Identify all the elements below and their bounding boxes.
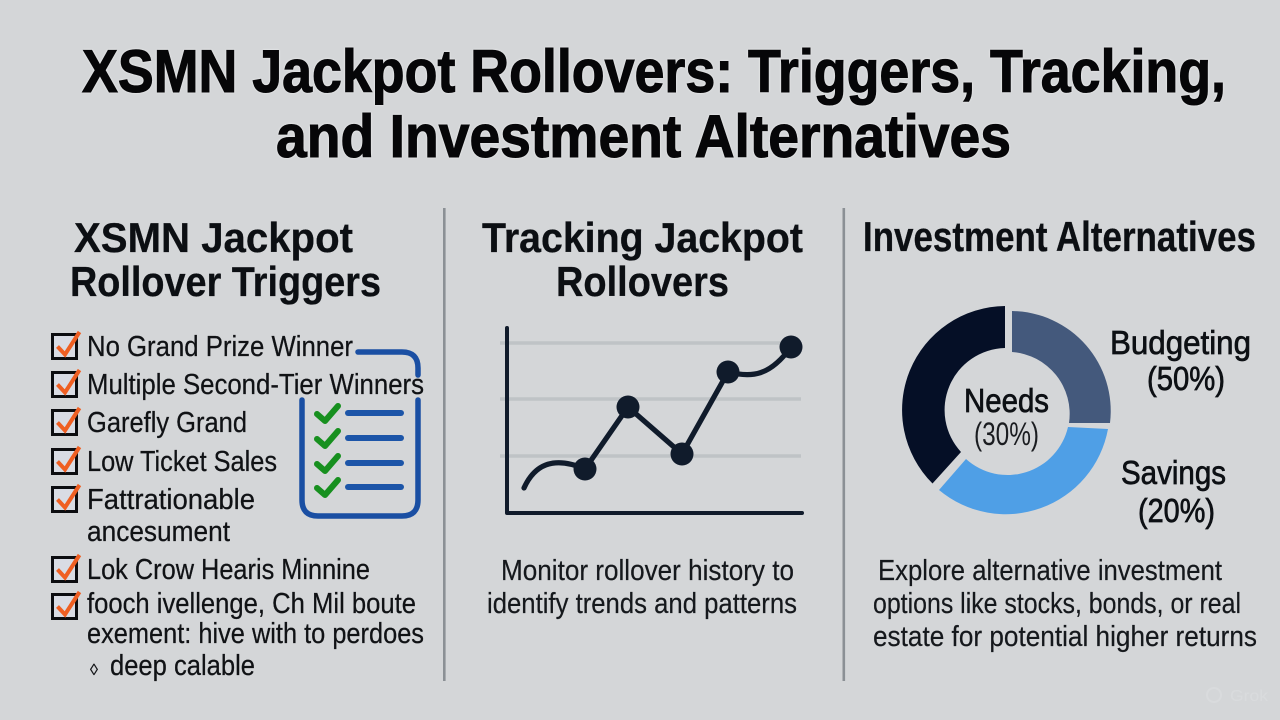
text: tracking description: identify trends and patterns: [487, 588, 797, 620]
checklist of triggers: No Grand Prize Winner: [87, 331, 353, 363]
checklist of triggers: ancesument: [87, 516, 230, 548]
label: budgeting: Budgeting: [1110, 324, 1251, 361]
label: savings: Savings: [1121, 454, 1226, 491]
label: savings: (20%): [1138, 492, 1215, 529]
checklist of triggers: Lok Crow Hearis Minnine: [87, 554, 370, 586]
checklist of triggers: fooch ivellenge, Ch Mil boute: [87, 588, 416, 620]
heading: triggers: [70, 214, 381, 305]
title: [82, 38, 1226, 170]
checklist of triggers: exement: hive with to perdoes: [87, 618, 424, 650]
checklist of triggers: Low Ticket Sales: [87, 446, 277, 478]
donut chart: [902, 306, 1111, 514]
donut centre label: [964, 382, 1049, 452]
checklist of triggers: Multiple Second-Tier Winners: [87, 369, 424, 401]
panel: rollover triggers: [52, 214, 424, 682]
watermark: Grok: [1230, 688, 1269, 705]
panel: tracking rollovers: [482, 214, 803, 620]
text: tracking description: [487, 555, 797, 620]
heading: tracking: Tracking Jackpot: [482, 214, 803, 261]
heading: tracking: Rollovers: [556, 258, 729, 305]
heading: tracking: [482, 214, 803, 305]
donut centre label: (30%): [974, 416, 1039, 452]
donut centre label: Needs: [964, 382, 1049, 419]
watermark: [1207, 688, 1269, 705]
text: investment description: [873, 555, 1257, 653]
text: investment description: Explore alternative investment: [878, 555, 1222, 587]
checklist of triggers: Garefly Grand: [87, 407, 247, 439]
checklist of triggers: [52, 331, 424, 682]
checklist of triggers: Fattrationable: [87, 484, 255, 516]
label: savings: [1121, 454, 1226, 529]
text: tracking description: Monitor rollover history to: [501, 555, 794, 587]
checklist of triggers: ◊: [90, 662, 98, 679]
heading: triggers: XSMN Jackpot: [74, 214, 353, 261]
icon: clipboard checklist: [302, 352, 418, 516]
label: budgeting: [1110, 324, 1251, 397]
title: and Investment Alternatives: [276, 103, 1011, 170]
panel: investment alternatives: [863, 213, 1257, 653]
label: budgeting: (50%): [1147, 360, 1225, 397]
line chart: [500, 328, 802, 513]
checklist of triggers: deep calable: [110, 650, 255, 682]
heading: triggers: Rollover Triggers: [70, 258, 381, 305]
